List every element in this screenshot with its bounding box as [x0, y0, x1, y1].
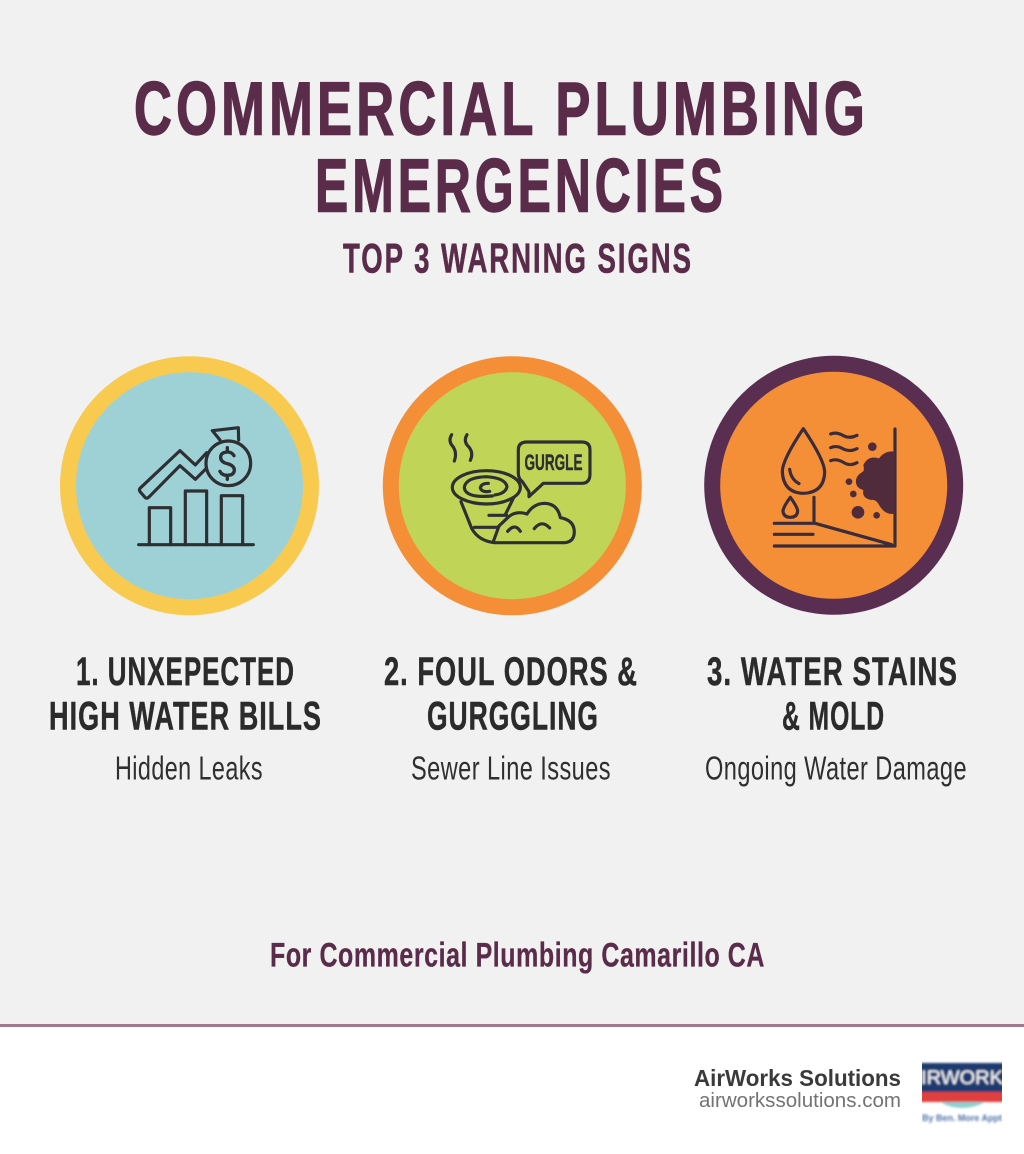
heading: GURGGLING — [427, 694, 599, 738]
heading — [707, 650, 958, 738]
subtitle: TOP 3 WARNING SIGNS — [343, 234, 693, 282]
logo — [920, 1063, 1004, 1123]
heading: 2. FOUL ODORS & — [384, 650, 638, 694]
heading — [384, 650, 638, 738]
logo: By Ben. More Appt — [922, 1113, 1002, 1123]
icon: rising chart with dollar coin — [139, 428, 253, 545]
badge: yellow and teal circle — [60, 356, 319, 615]
title — [134, 66, 869, 228]
description: Hidden Leaks — [115, 749, 263, 786]
location line: For Commercial Plumbing Camarillo CA — [270, 936, 765, 974]
title: EMERGENCIES — [315, 144, 727, 228]
brand name: AirWorks Solutions — [694, 1065, 901, 1091]
description: Sewer Line Issues — [411, 749, 611, 786]
panel: water stains — [704, 356, 967, 786]
heading: HIGH WATER BILLS — [49, 694, 322, 738]
heading: & MOLD — [782, 694, 885, 738]
panel: high water bills — [49, 356, 322, 786]
badge: orange and green circle — [383, 356, 642, 615]
icon: drain, speech bubble and sludge — [450, 435, 590, 543]
panel: foul odors — [383, 356, 642, 786]
heading — [49, 650, 322, 738]
badge: purple and orange circle — [704, 356, 963, 615]
icon: water drops and mold on wall — [774, 429, 895, 546]
brand url: airworkssolutions.com — [699, 1090, 901, 1112]
heading: 1. UNXEPECTED — [76, 650, 295, 694]
icon label: gurgle: GURGLE — [524, 450, 582, 475]
footer — [0, 1024, 1024, 1154]
logo: IRWORK — [921, 1068, 1003, 1089]
